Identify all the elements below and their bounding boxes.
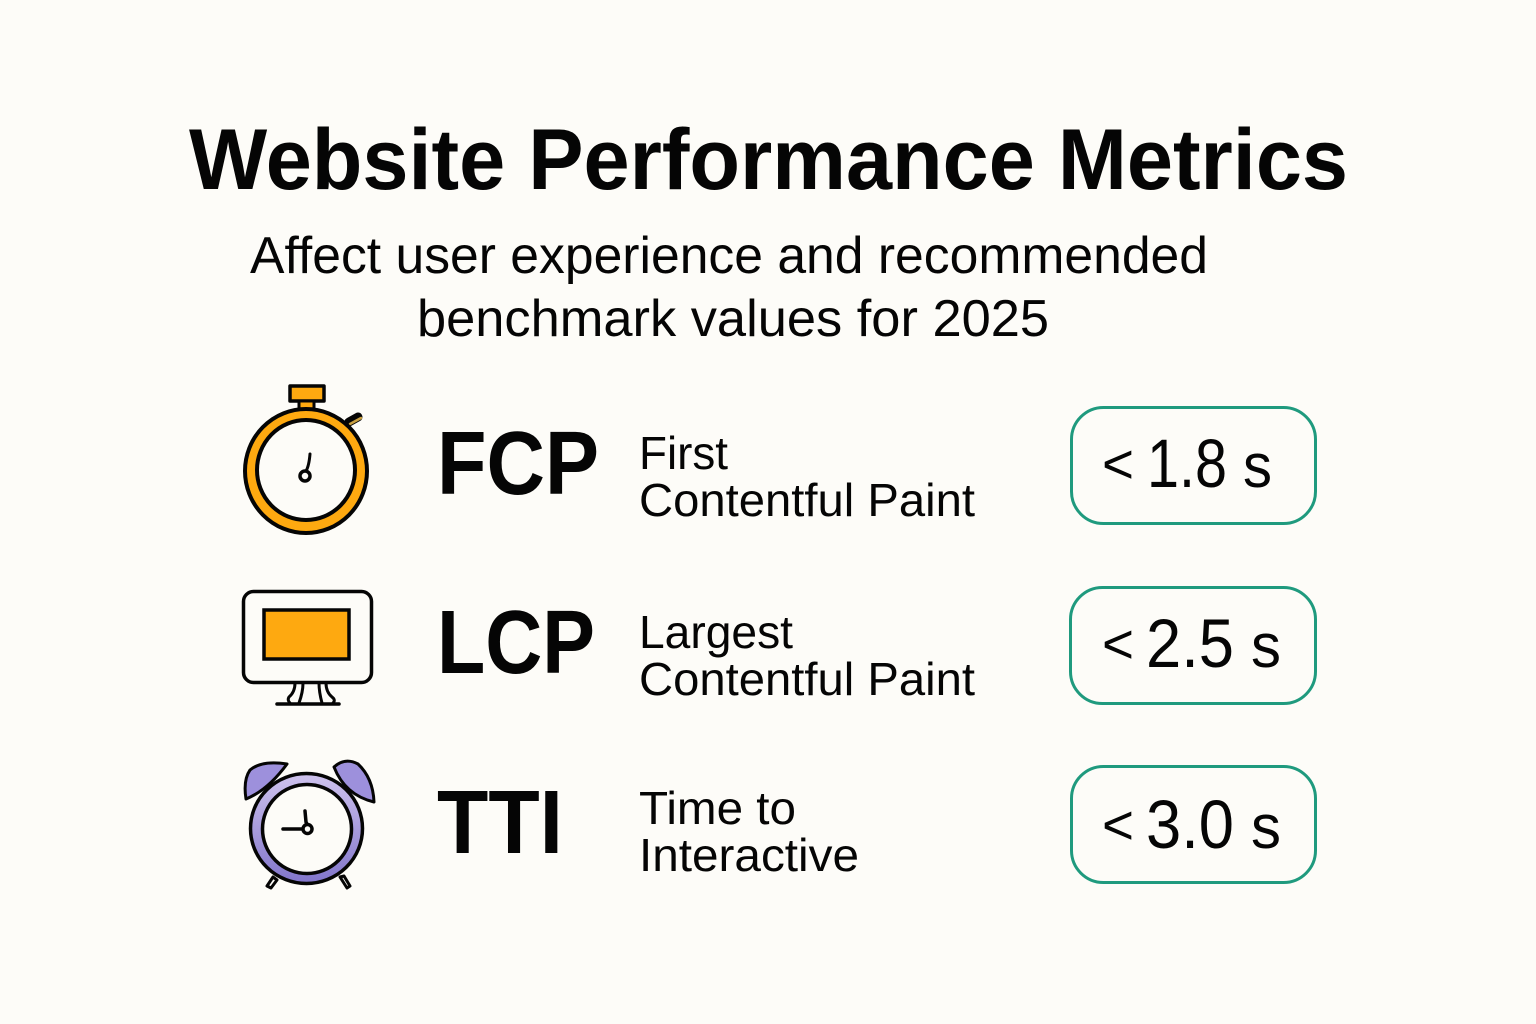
benchmark badge: LCP: < [1102, 612, 1134, 675]
metric description: Time to Interactive: Interactive [639, 829, 859, 881]
metric name: TTI: TTI [437, 773, 563, 873]
subtitle: benchmark values for 2025 [417, 290, 1049, 348]
metric description: First Contentful Paint: Contentful Paint [639, 474, 975, 526]
metric description: Largest Contentful Paint: Contentful Paint [639, 653, 975, 705]
benchmark badge: TTI: s [1251, 793, 1281, 862]
metric name: FCP: FCP [437, 414, 599, 514]
benchmark badge: TTI: 3.0 [1146, 786, 1234, 863]
icon: stopwatch [245, 386, 367, 533]
metric description: First Contentful Paint [639, 427, 975, 526]
title: Website Performance Metrics [189, 112, 1348, 208]
metric name: LCP: LCP [437, 593, 595, 693]
benchmark badge: FCP: s [1243, 432, 1272, 501]
icon: monitor [244, 592, 372, 704]
metric description: Time to Interactive: Time to [639, 782, 796, 834]
benchmark badge: FCP: 1.8 [1147, 425, 1227, 502]
metric description: First Contentful Paint: First [639, 427, 728, 479]
benchmark badge: LCP: 2.5 [1146, 605, 1234, 682]
icon: alarm clock [245, 761, 374, 888]
benchmark badge: TTI [1072, 766, 1316, 882]
benchmark badge: FCP: < [1102, 432, 1134, 495]
benchmark badge: LCP [1070, 588, 1316, 704]
benchmark badge: TTI: < [1102, 793, 1134, 856]
benchmark badge: LCP: s [1251, 612, 1281, 681]
subtitle: Affect user experience and recommended [250, 227, 1208, 285]
metric description: Largest Contentful Paint: Largest [639, 606, 793, 658]
metric description: Largest Contentful Paint [639, 606, 975, 705]
row: TTI [245, 761, 1316, 888]
row: LCP [244, 588, 1316, 705]
subtitle [250, 227, 1208, 348]
metric description: Time to Interactive [639, 782, 859, 881]
benchmark badge: FCP [1072, 408, 1316, 524]
row: FCP [245, 386, 1316, 533]
